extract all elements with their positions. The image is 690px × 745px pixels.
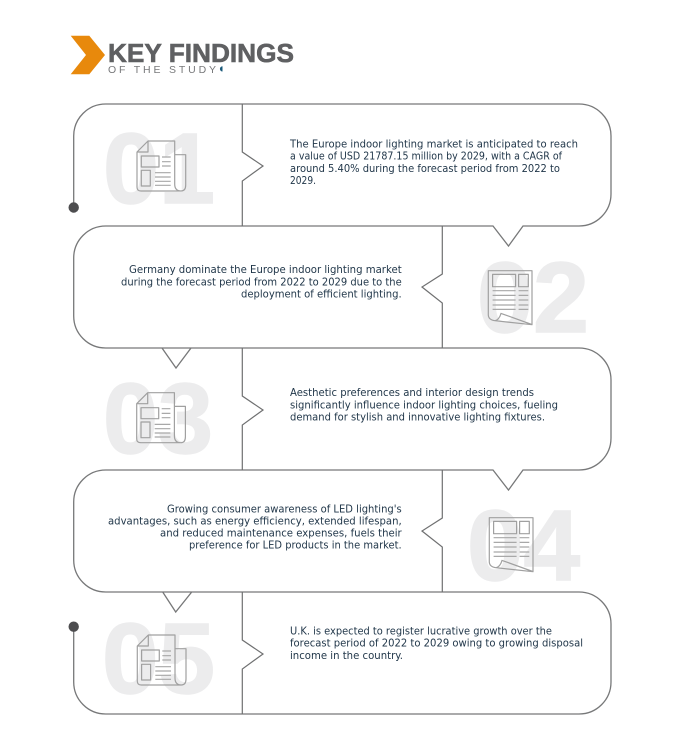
text: finding 2 [121, 263, 402, 301]
text: finding 2: Germany dominate the Europe indoor lighting market [129, 263, 402, 276]
icon: small navy mark [220, 66, 222, 72]
text: finding 2: deployment of efficient lighting. [241, 288, 402, 301]
number 05: 05 [102, 603, 215, 715]
text: finding 5: U.K. is expected to register lucrative growth over the [290, 624, 552, 637]
text: finding 4: Growing consumer awareness of LED lighting's [167, 502, 402, 515]
text: finding 5: forecast period of 2022 to 2029 owing to growing disposal [290, 637, 583, 650]
text: finding 4 [108, 502, 402, 552]
number 04: 04 [467, 490, 580, 602]
text: finding 5: income in the country. [290, 649, 403, 662]
text: finding 3: Aesthetic preferences and interior design trends [290, 386, 534, 399]
number 02: 02 [477, 242, 589, 354]
divider with arrow: row 5 [242, 592, 263, 714]
icon: newspaper row 2 [488, 271, 532, 325]
text: finding 3 [290, 386, 558, 424]
icon: newspaper row 4 [489, 518, 533, 572]
text: finding 1: around 5.40% during the forecast period from 2022 to [290, 162, 560, 175]
text: finding 1: 2029. [290, 174, 316, 187]
flow outline connecting all five findings [74, 104, 611, 714]
start dot [68, 202, 79, 213]
text: finding 3: significantly influence indoor lighting choices, fueling [290, 398, 558, 411]
icon: orange chevron [71, 36, 105, 74]
text: finding 4: and reduced maintenance expenses, fuels their [160, 527, 402, 540]
text: finding 3: demand for stylish and innovative lighting fixtures. [290, 411, 545, 424]
icon: newspaper row 3 [137, 393, 185, 443]
text: finding 4: preference for LED products in the market. [189, 539, 402, 552]
icon: newspaper row 1 [137, 141, 186, 191]
header: key findings of the study [71, 36, 294, 76]
number 01: 01 [103, 113, 215, 225]
text: finding 2: during the forecast period from 2022 to 2029 due to the [121, 276, 402, 288]
icon: newspaper row 5 [137, 635, 186, 685]
title: KEY FINDINGS [108, 38, 294, 68]
divider with arrow: row 3 [242, 348, 263, 470]
end dot [68, 622, 79, 632]
divider with arrow: row 2 [422, 226, 442, 348]
text: finding 1: The Europe indoor lighting market is anticipated to reach [289, 138, 578, 150]
text: finding 5 [290, 624, 583, 662]
divider with arrow: row 1 [242, 104, 263, 226]
text: finding 1: a value of USD 21787.15 million by 2029, with a CAGR of [290, 150, 562, 163]
divider with arrow: row 4 [422, 470, 442, 592]
subtitle: OF THE STUDY [108, 64, 216, 76]
number 03: 03 [103, 363, 213, 475]
text: finding 1 [289, 138, 578, 187]
text: finding 4: advantages, such as energy efficiency, extended lifespan, [108, 514, 402, 527]
